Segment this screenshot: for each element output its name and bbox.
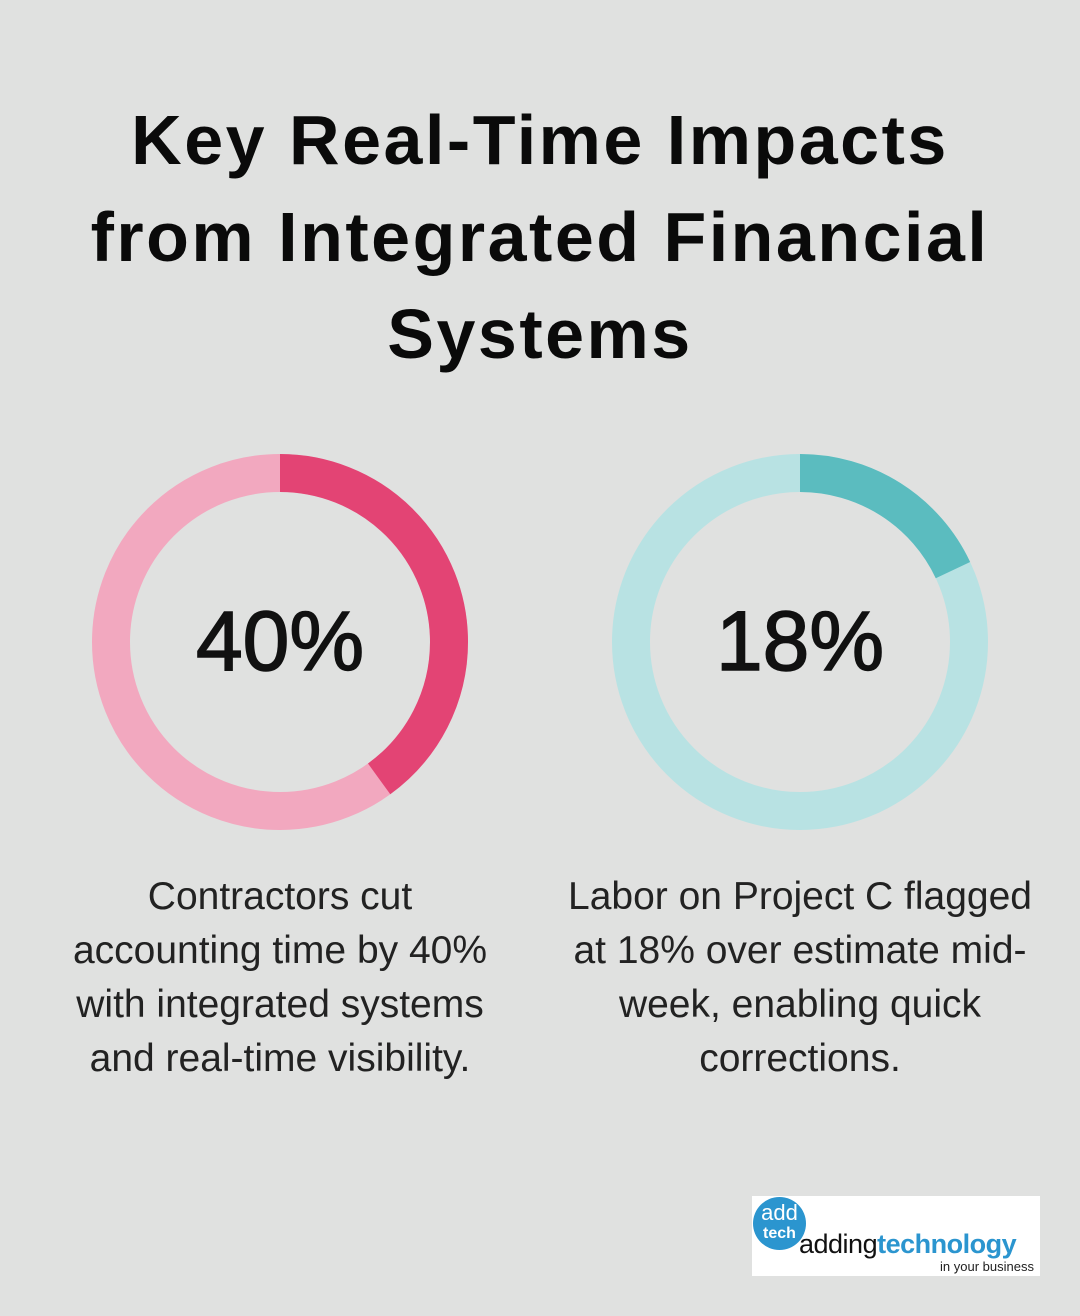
text: right description bbox=[568, 875, 1032, 1080]
title: Key Real-Time Impacts bbox=[131, 101, 949, 179]
text: right description: corrections. bbox=[699, 1037, 901, 1080]
text: left description: Contractors cut bbox=[148, 875, 412, 918]
text: left description: with integrated systems bbox=[76, 983, 484, 1026]
logo: in your business bbox=[940, 1259, 1034, 1274]
text: left description: accounting time by 40% bbox=[73, 929, 487, 972]
text: left description bbox=[73, 875, 487, 1080]
donut chart: 40%: 40% bbox=[196, 594, 364, 688]
title: from Integrated Financial bbox=[91, 198, 989, 276]
title: Systems bbox=[387, 295, 693, 373]
text: right description: Labor on Project C flagged bbox=[568, 875, 1032, 918]
logo: tech bbox=[763, 1225, 796, 1242]
donut chart: 18%: 18% bbox=[716, 594, 884, 688]
text: right description: at 18% over estimate mid- bbox=[573, 929, 1026, 972]
logo: addingtechnology bbox=[799, 1229, 1016, 1259]
logo bbox=[752, 1196, 1040, 1276]
text: left description: and real-time visibility. bbox=[90, 1037, 470, 1080]
donut chart: 40% bbox=[92, 454, 468, 830]
title bbox=[91, 101, 989, 373]
donut chart: 18% bbox=[612, 454, 988, 830]
text: right description: week, enabling quick bbox=[619, 983, 981, 1026]
logo: add bbox=[761, 1200, 798, 1225]
